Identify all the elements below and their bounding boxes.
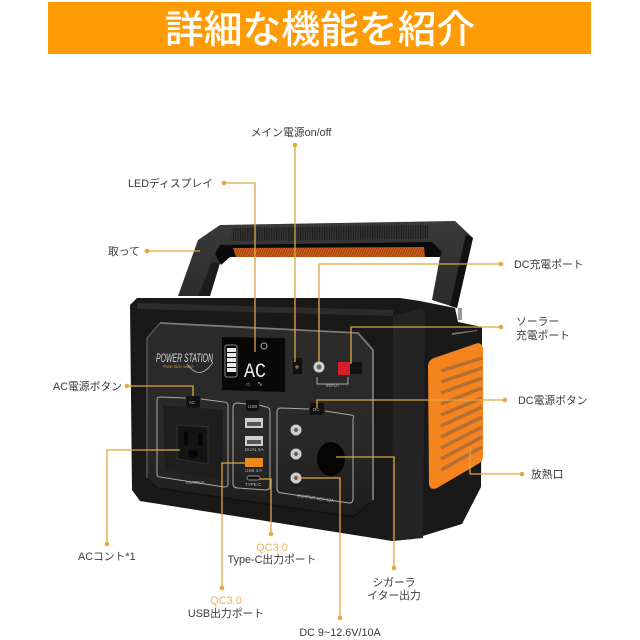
DC output panel: DC: [313, 407, 320, 412]
label: cigarette lighter output: イター出力: [367, 589, 421, 602]
label: solar charge port: 充電ポート: [516, 329, 570, 342]
USB ports panel: USB: [248, 404, 257, 409]
label: DC output: DC 9~12.6V/10A: [299, 627, 381, 639]
label: solar charge port: ソーラー: [516, 316, 559, 328]
LED display: ☼: [245, 381, 251, 388]
AC outlet panel: AC: [189, 400, 196, 405]
label: QC3.0 Type-C port: Type-C出力ポート: [228, 553, 316, 566]
LED display: ∿: [257, 381, 263, 388]
label: QC3.0 USB port: USB出力ポート: [188, 607, 264, 620]
USB ports panel: USB 3.0: [245, 468, 262, 473]
title banner: [48, 0, 591, 55]
AC outlet panel: OUTPUT: [186, 480, 205, 485]
DC charge port and input: INPUT: [326, 383, 340, 388]
DC output panel: OUTPUT 12V 10A: [297, 493, 334, 503]
label: cigarette lighter output: シガーラ: [372, 576, 416, 589]
DC output panel: [277, 403, 354, 503]
product: portable power station: [130, 221, 483, 541]
USB ports panel: [233, 400, 270, 490]
front panel: [147, 323, 373, 517]
LED display: AC: [244, 361, 266, 384]
LED display: [222, 337, 285, 392]
title banner: 詳細な機能を紹介: [165, 0, 475, 55]
label: handle: 取って: [108, 246, 140, 258]
label: main power: メイン電源on/off: [251, 125, 332, 139]
logo: POWER STATION: [156, 351, 213, 373]
label: LED display: LEDディスプレイ: [128, 176, 213, 190]
main body: [130, 298, 482, 541]
DC charge port and input: [314, 362, 362, 388]
label: AC outlet: ACコント*1: [78, 551, 136, 563]
label: QC3.0 USB port: QC3.0: [210, 595, 242, 607]
label: heat vent: 放熱口: [531, 467, 563, 481]
label: DC power button: DC電源ボタン: [518, 393, 588, 407]
AC outlet panel: [157, 396, 228, 487]
label: AC power button: AC電源ボタン: [53, 379, 122, 393]
callout leader lines: [107, 145, 522, 618]
USB ports panel: DUAL 5A: [245, 447, 264, 452]
label: DC charge port: DC充電ポート: [514, 258, 584, 271]
logo: POWER STATION: POWER STATION: [156, 351, 213, 365]
handle: [178, 221, 473, 320]
logo: POWER STATION: Pure sine wave: [163, 364, 194, 369]
main power switch: [292, 357, 303, 375]
USB ports panel: TYPE-C: [245, 482, 262, 487]
orange side vent: [428, 343, 483, 489]
callout dots: [105, 143, 524, 620]
label: QC3.0 Type-C port: QC3.0: [256, 542, 288, 554]
